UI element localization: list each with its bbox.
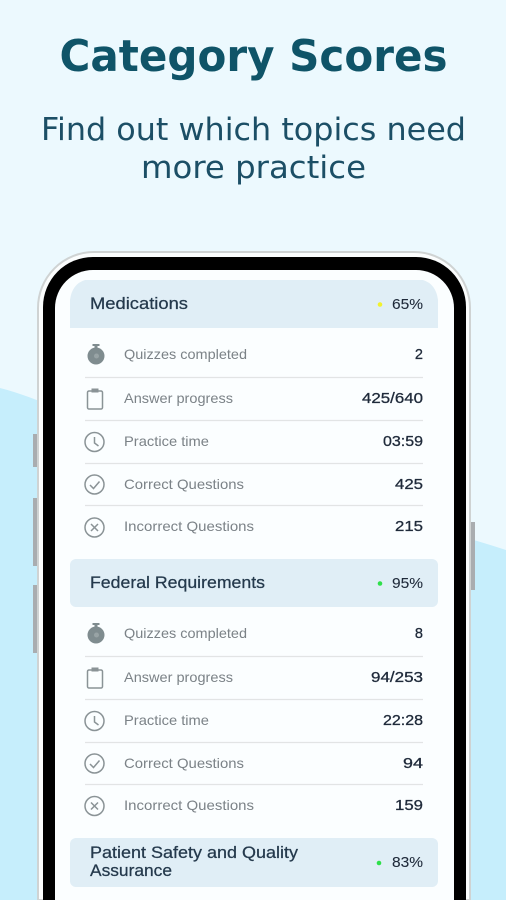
- row: incorrect questions: [85, 518, 423, 537]
- row: correct questions: 425: [395, 477, 423, 493]
- row: correct questions: 94: [403, 756, 423, 772]
- row: correct questions: Correct Questions: [124, 755, 244, 771]
- row: answer progress: Answer progress: [124, 390, 233, 406]
- subtitle: Find out which topics need: [41, 112, 466, 148]
- row: answer progress: 425/640: [362, 391, 423, 407]
- row: incorrect questions: Incorrect Questions: [124, 518, 254, 534]
- phone frame: [38, 252, 470, 900]
- panel: Medications: [70, 280, 438, 537]
- row: incorrect questions: 215: [395, 519, 423, 535]
- row: quizzes completed: 8: [415, 626, 423, 642]
- subtitle: [41, 112, 466, 186]
- background wave: [0, 388, 506, 900]
- row: practice time: [85, 432, 423, 452]
- row: practice time: 22:28: [383, 713, 423, 729]
- row: incorrect questions: Incorrect Questions: [124, 797, 254, 813]
- category header: 65%: [392, 296, 423, 313]
- category header: Federal Requirements: [90, 573, 265, 592]
- row: answer progress: [88, 668, 423, 688]
- row: quizzes completed: [88, 623, 423, 644]
- row: answer progress: 94/253: [371, 670, 423, 686]
- subtitle: more practice: [141, 150, 366, 186]
- row: incorrect questions: [85, 796, 423, 816]
- panel: Patient Safety and Quality Assurance: Patient Safety and Quality: [90, 843, 299, 862]
- row: incorrect questions: 159: [395, 798, 423, 814]
- row: practice time: [85, 712, 423, 730]
- row: quizzes completed: 2: [415, 347, 423, 363]
- panel: Federal Requirements: [70, 559, 438, 816]
- row: practice time: Practice time: [124, 433, 209, 449]
- row: quizzes completed: [88, 344, 423, 364]
- category header: [70, 559, 438, 607]
- category header: Medications: [90, 294, 188, 313]
- row: correct questions: Correct Questions: [124, 476, 244, 492]
- row: practice time: 03:59: [383, 434, 423, 450]
- panel: Patient Safety and Quality Assurance: 83%: [392, 854, 423, 871]
- row: answer progress: Answer progress: [124, 669, 233, 685]
- row: practice time: Practice time: [124, 712, 209, 728]
- category header: 95%: [392, 575, 423, 592]
- title: Category Scores: [60, 31, 448, 82]
- row: answer progress: [88, 388, 423, 409]
- row: correct questions: [85, 754, 423, 773]
- panel: Patient Safety and Quality Assurance: Assurance: [90, 861, 172, 880]
- row: correct questions: [85, 475, 423, 494]
- phone side buttons: [33, 434, 475, 653]
- panel: Patient Safety and Quality Assurance: [70, 838, 438, 887]
- row: quizzes completed: Quizzes completed: [124, 625, 247, 641]
- row: quizzes completed: Quizzes completed: [124, 346, 247, 362]
- category header: [70, 280, 438, 328]
